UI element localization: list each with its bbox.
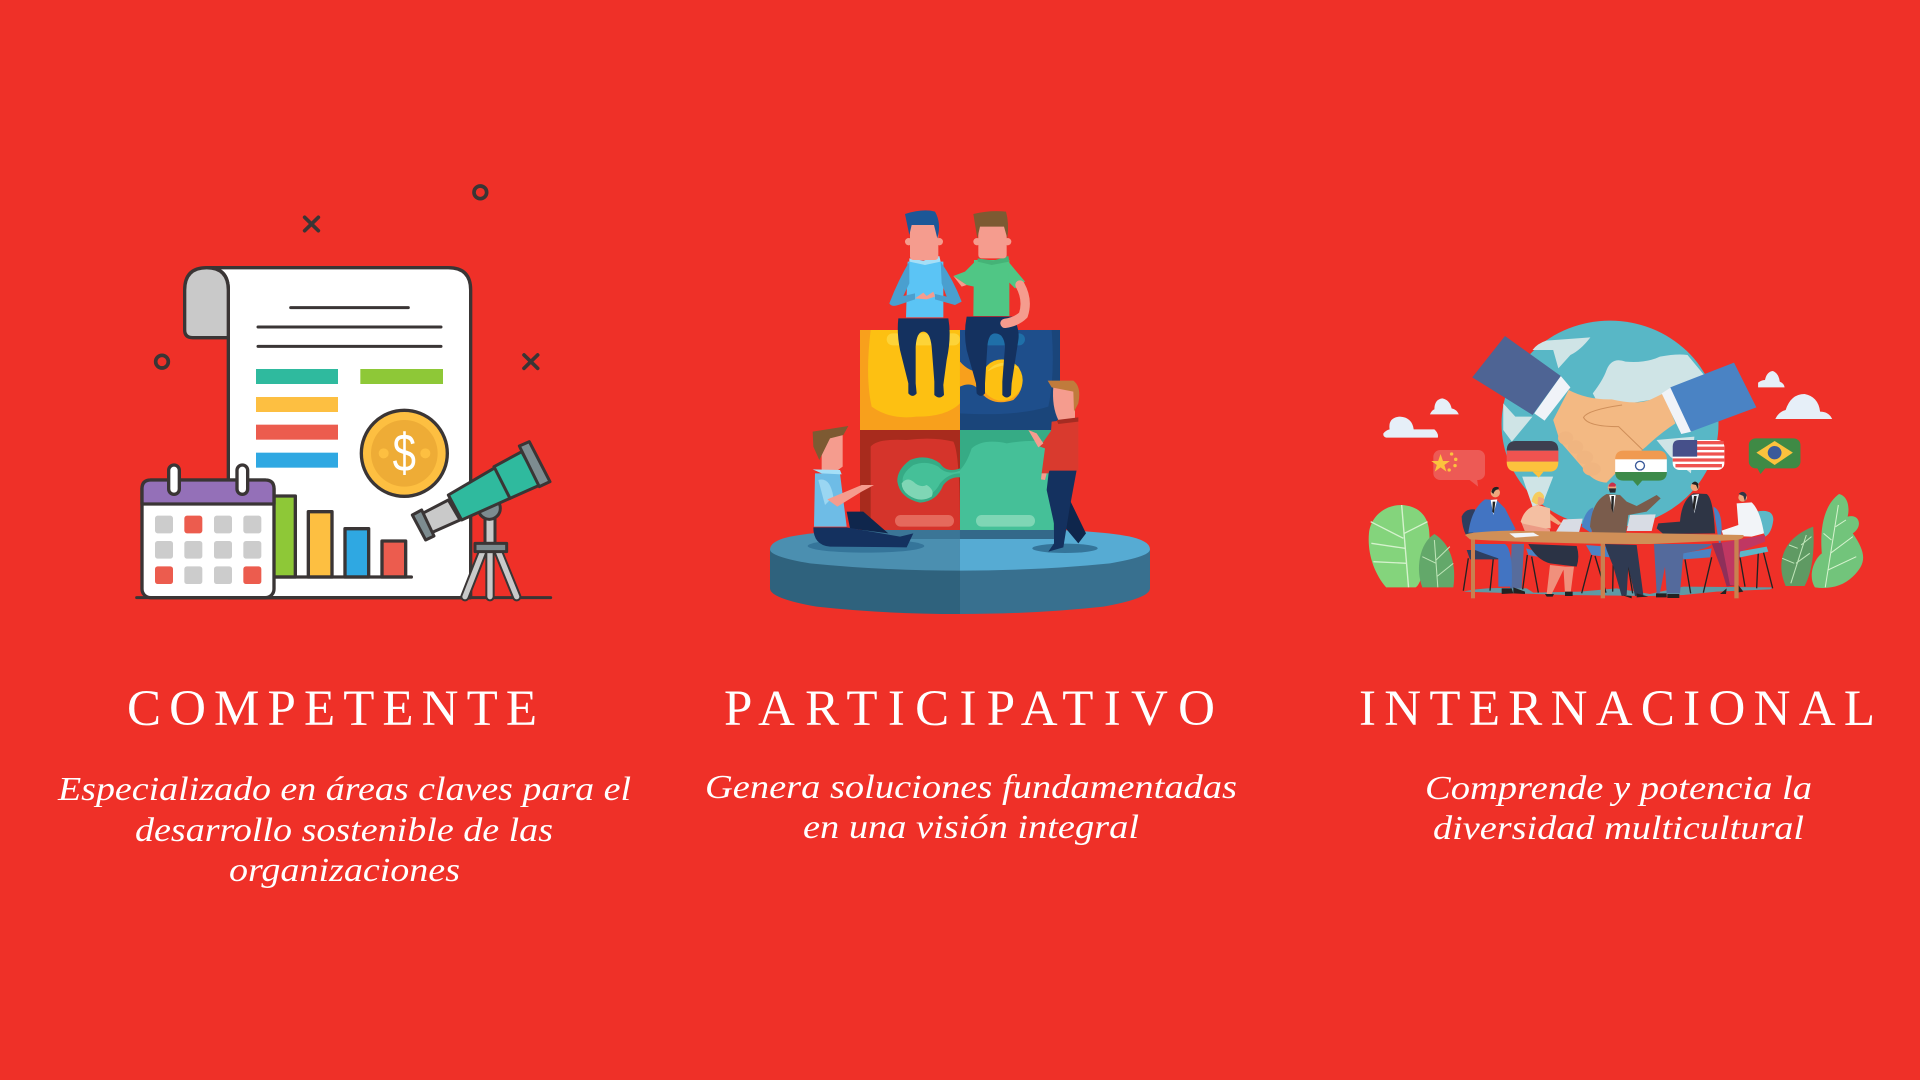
laptop bbox=[1554, 519, 1583, 535]
flag: germany bbox=[1507, 441, 1558, 478]
flags bbox=[1431, 438, 1800, 487]
person: woman in white bbox=[1712, 492, 1773, 594]
decorative marks bbox=[156, 186, 538, 368]
description: competente: Especializado en áreas claves para el bbox=[57, 771, 631, 808]
chair legs bbox=[1463, 552, 1773, 593]
table bbox=[1465, 531, 1744, 598]
heading: internacional: INTERNACIONAL bbox=[1359, 681, 1875, 737]
person: green shirt seated bbox=[953, 211, 1025, 397]
description: internacional: Comprende y potencia la bbox=[1425, 770, 1812, 807]
illustration: team on puzzle bbox=[770, 210, 1150, 614]
flag: india bbox=[1615, 451, 1667, 486]
person: woman in pink bbox=[1521, 492, 1578, 597]
clouds bbox=[1383, 371, 1832, 438]
plants bbox=[1369, 494, 1863, 588]
telescope bbox=[412, 442, 550, 597]
coin with dollar sign bbox=[361, 410, 447, 496]
coin with dollar sign: $ bbox=[393, 425, 416, 484]
panel: competente bbox=[57, 186, 631, 889]
globe bbox=[1502, 321, 1718, 527]
calendar bbox=[142, 465, 274, 598]
description: participativo: en una visión integral bbox=[803, 809, 1139, 846]
heading: participativo: PARTICIPATIVO bbox=[724, 681, 1215, 737]
description: internacional: diversidad multicultural bbox=[1433, 810, 1804, 847]
paper scroll bbox=[185, 268, 471, 598]
puzzle pieces bbox=[860, 330, 1060, 530]
description: competente: desarrollo sostenible de las bbox=[135, 812, 553, 849]
person: man in brown suit bbox=[1582, 482, 1661, 598]
panel: internacional bbox=[1359, 321, 1875, 847]
heading: competente: COMPETENTE bbox=[127, 681, 537, 737]
handshake bbox=[1472, 336, 1756, 483]
person: blue shirt sitting on floor bbox=[808, 426, 924, 553]
flag: usa bbox=[1673, 440, 1724, 470]
flag: brazil bbox=[1749, 438, 1800, 474]
person: red sweater standing bbox=[1028, 381, 1098, 553]
floor shadow bbox=[1463, 587, 1773, 596]
panel: participativo bbox=[705, 210, 1237, 846]
illustration: people at meeting table bbox=[1462, 482, 1773, 598]
bar chart bbox=[267, 496, 411, 577]
person: blue shirt seated bbox=[889, 210, 962, 397]
description: participativo: Genera soluciones fundamentadas bbox=[705, 769, 1237, 806]
description: competente: organizaciones bbox=[229, 852, 460, 889]
platform bbox=[770, 528, 1150, 614]
illustration: global handshake bbox=[1369, 321, 1863, 588]
laptop bbox=[1627, 514, 1656, 531]
ground line bbox=[137, 593, 551, 602]
icon: document with calendar, chart and telescope bbox=[137, 186, 551, 598]
person: man in blue suit bbox=[1462, 487, 1525, 594]
flag: china bbox=[1431, 450, 1485, 487]
person: man in black suit bbox=[1654, 482, 1722, 598]
